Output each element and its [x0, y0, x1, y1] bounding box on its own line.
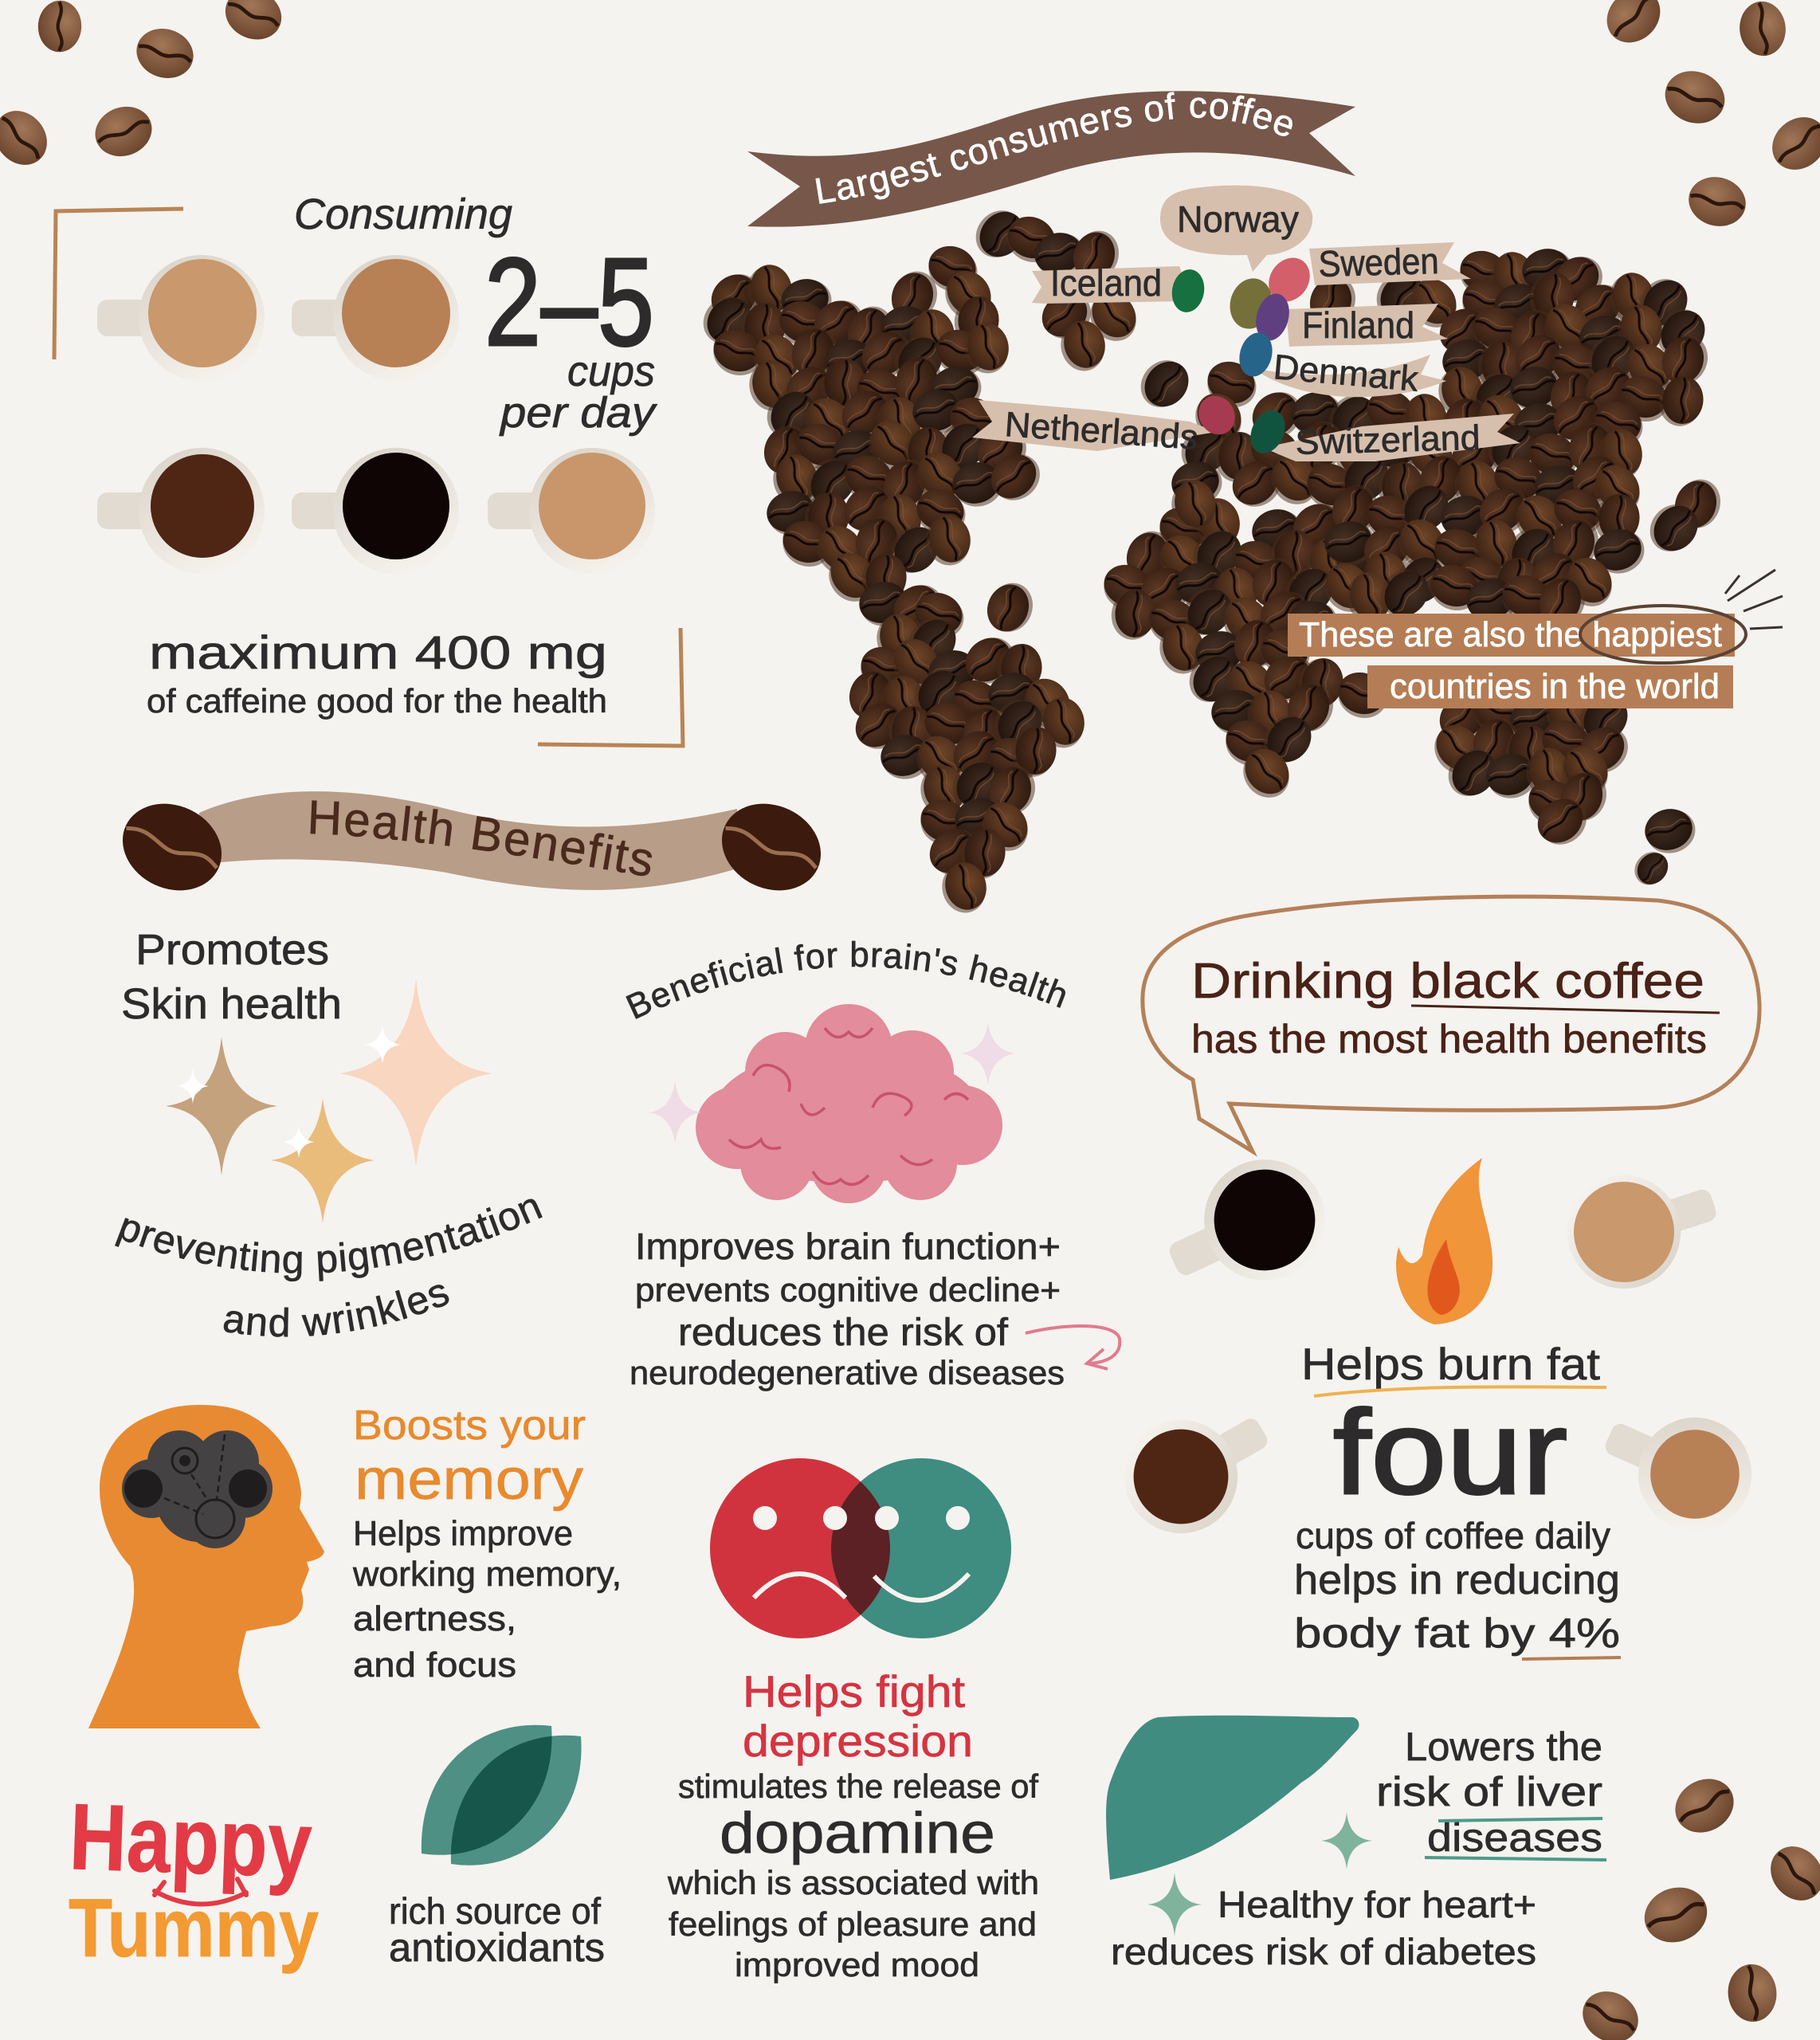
- callout: happiest countries: These are also the happiest: [1299, 615, 1722, 654]
- corner bracket top left: [54, 209, 183, 359]
- panel: caffeine dosage: [54, 190, 683, 746]
- cups per day: cups: [567, 347, 655, 395]
- underline: [1314, 1387, 1606, 1396]
- panel: liver: Lowers the: [1405, 1724, 1602, 1769]
- cup: milk: [1552, 1149, 1731, 1304]
- label: Switzerland: Switzerland: [1295, 418, 1481, 462]
- label: Netherlands: Netherlands: [1003, 405, 1199, 457]
- panel: memory: [88, 1402, 622, 1728]
- panel: memory: alertness,: [353, 1599, 516, 1638]
- icon: green sparkle: [1321, 1812, 1372, 1869]
- cup: brown: [1104, 1380, 1291, 1554]
- banner: health benefits: [123, 791, 821, 891]
- label: Switzerland: [1263, 414, 1520, 462]
- world map of coffee beans: [694, 201, 1727, 918]
- bean right: [708, 788, 835, 906]
- icon: head: [88, 1405, 324, 1728]
- panel: burn fat: helps in reducing: [1294, 1557, 1620, 1603]
- panel: skin health: Promotes: [135, 926, 329, 974]
- heading: consuming: Consuming: [294, 190, 512, 238]
- icon: sad and happy faces: [710, 1458, 1011, 1638]
- panel: depression: feelings of pleasure and: [669, 1905, 1037, 1943]
- panel: black coffee: [1143, 896, 1759, 1324]
- panel: liver: reduces risk of diabetes: [1111, 1931, 1536, 1972]
- label: Norway: [1160, 186, 1312, 272]
- underlines: [1425, 1818, 1606, 1860]
- panel: brain health: neurodegenerative diseases: [630, 1354, 1065, 1391]
- panel: antioxidants: [389, 1725, 605, 1970]
- panel: happy tummy: [68, 1784, 319, 1975]
- panel: burn fat: cups of coffee daily: [1296, 1515, 1610, 1556]
- icon: leaves: [422, 1725, 582, 1865]
- coloured beans: [1169, 249, 1318, 459]
- emphasis lines: [1725, 570, 1783, 629]
- icon: green sparkle small: [1147, 1873, 1202, 1936]
- label: Norway: Norway: [1177, 198, 1299, 240]
- loose coffee beans: top right: [1596, 0, 1820, 233]
- corner bracket bottom right: [538, 628, 683, 746]
- panel: depression: stimulates the release of: [678, 1767, 1038, 1805]
- panel: skin health: and wrinkles: [223, 1285, 449, 1337]
- hand-drawn ellipse: [1580, 606, 1746, 663]
- panel: brain health: Beneficial for brain's health: [626, 940, 1065, 1019]
- bean left: [108, 788, 236, 906]
- panel: antioxidants: rich source of: [389, 1890, 601, 1932]
- banner: largest consumers of coffee: [747, 91, 1355, 227]
- loose coffee beans: top left: [0, 0, 290, 175]
- cups per day: [499, 347, 657, 437]
- label: Denmark: Denmark: [1272, 347, 1421, 399]
- panel: happy tummy: Tummy: [69, 1882, 319, 1975]
- panel: black coffee: Drinking black coffee: [1191, 954, 1704, 1009]
- panel: memory: working memory,: [352, 1555, 622, 1594]
- panel: antioxidants: antioxidants: [389, 1925, 605, 1970]
- panel: burn fat: [1104, 1339, 1770, 1659]
- panel: skin health: [115, 926, 543, 1337]
- cups per day: per day: [499, 389, 657, 437]
- panel: brain health: Improves brain function+: [635, 1226, 1061, 1267]
- caffeine caption: of caffeine good for the health: [147, 682, 607, 720]
- panel: depression: [667, 1458, 1039, 1983]
- icon: sparkles: [166, 979, 492, 1223]
- panel: brain health: reduces the risk of: [678, 1312, 1009, 1354]
- panel: liver: risk of liver: [1376, 1769, 1602, 1815]
- panel: burn fat: four: [1333, 1385, 1567, 1519]
- big number 2-5: 2–5: [484, 233, 654, 372]
- cup: black: [1148, 1140, 1345, 1317]
- panel: liver: Healthy for heart+: [1218, 1884, 1536, 1925]
- labels: countries: [972, 186, 1520, 462]
- panel: memory: Boosts your: [353, 1402, 586, 1449]
- maximum 400 mg: maximum 400 mg: [149, 627, 607, 679]
- panel: depression: Helps fight: [743, 1666, 965, 1716]
- icon: flame: [1396, 1158, 1492, 1324]
- panel: burn fat: body fat by 4%: [1294, 1610, 1620, 1657]
- arrow: pink curl: [1026, 1326, 1120, 1369]
- cup: caramel: [1586, 1384, 1770, 1549]
- banner: health benefits: Health Benefits: [311, 800, 652, 877]
- panel: memory: memory: [355, 1448, 583, 1512]
- panel: depression: dopamine: [720, 1802, 995, 1865]
- panel: black coffee: has the most health benefits: [1191, 1017, 1707, 1061]
- panel: skin health: Skin health: [121, 980, 342, 1028]
- smile: [155, 1879, 246, 1905]
- underline: [1411, 1006, 1720, 1013]
- label: Finland: Finland: [1302, 304, 1414, 346]
- panel: depression: improved mood: [735, 1946, 979, 1983]
- panel: liver: diseases: [1427, 1815, 1602, 1860]
- label: Sweden: Sweden: [1318, 240, 1439, 284]
- loose coffee beans: bottom right: [1574, 1768, 1820, 2040]
- panel: depression: depression: [743, 1716, 973, 1766]
- icon: brain: [649, 1004, 1016, 1203]
- banner: largest consumers of coffee: Largest consumers of coffee: [815, 92, 1292, 204]
- cups grid: [97, 255, 655, 574]
- speech bubble: [1143, 896, 1759, 1151]
- label: Iceland: Iceland: [1050, 262, 1162, 304]
- callout: happiest countries: countries in the world: [1390, 667, 1720, 706]
- panel: brain health: [626, 940, 1122, 1391]
- panel: memory: and focus: [353, 1646, 516, 1685]
- panel: happy tummy: Happy: [68, 1784, 314, 1898]
- panel: skin health: preventing pigmentation: [115, 1198, 543, 1281]
- callout: happiest countries: [1288, 570, 1783, 708]
- underline: [1522, 1658, 1621, 1659]
- panel: liver: [1106, 1716, 1606, 1972]
- panel: memory: Helps improve: [353, 1514, 573, 1553]
- panel: brain health: prevents cognitive decline+: [635, 1271, 1061, 1308]
- icon: liver: [1106, 1716, 1359, 1880]
- panel: depression: which is associated with: [667, 1864, 1039, 1901]
- panel: burn fat: Helps burn fat: [1301, 1339, 1600, 1389]
